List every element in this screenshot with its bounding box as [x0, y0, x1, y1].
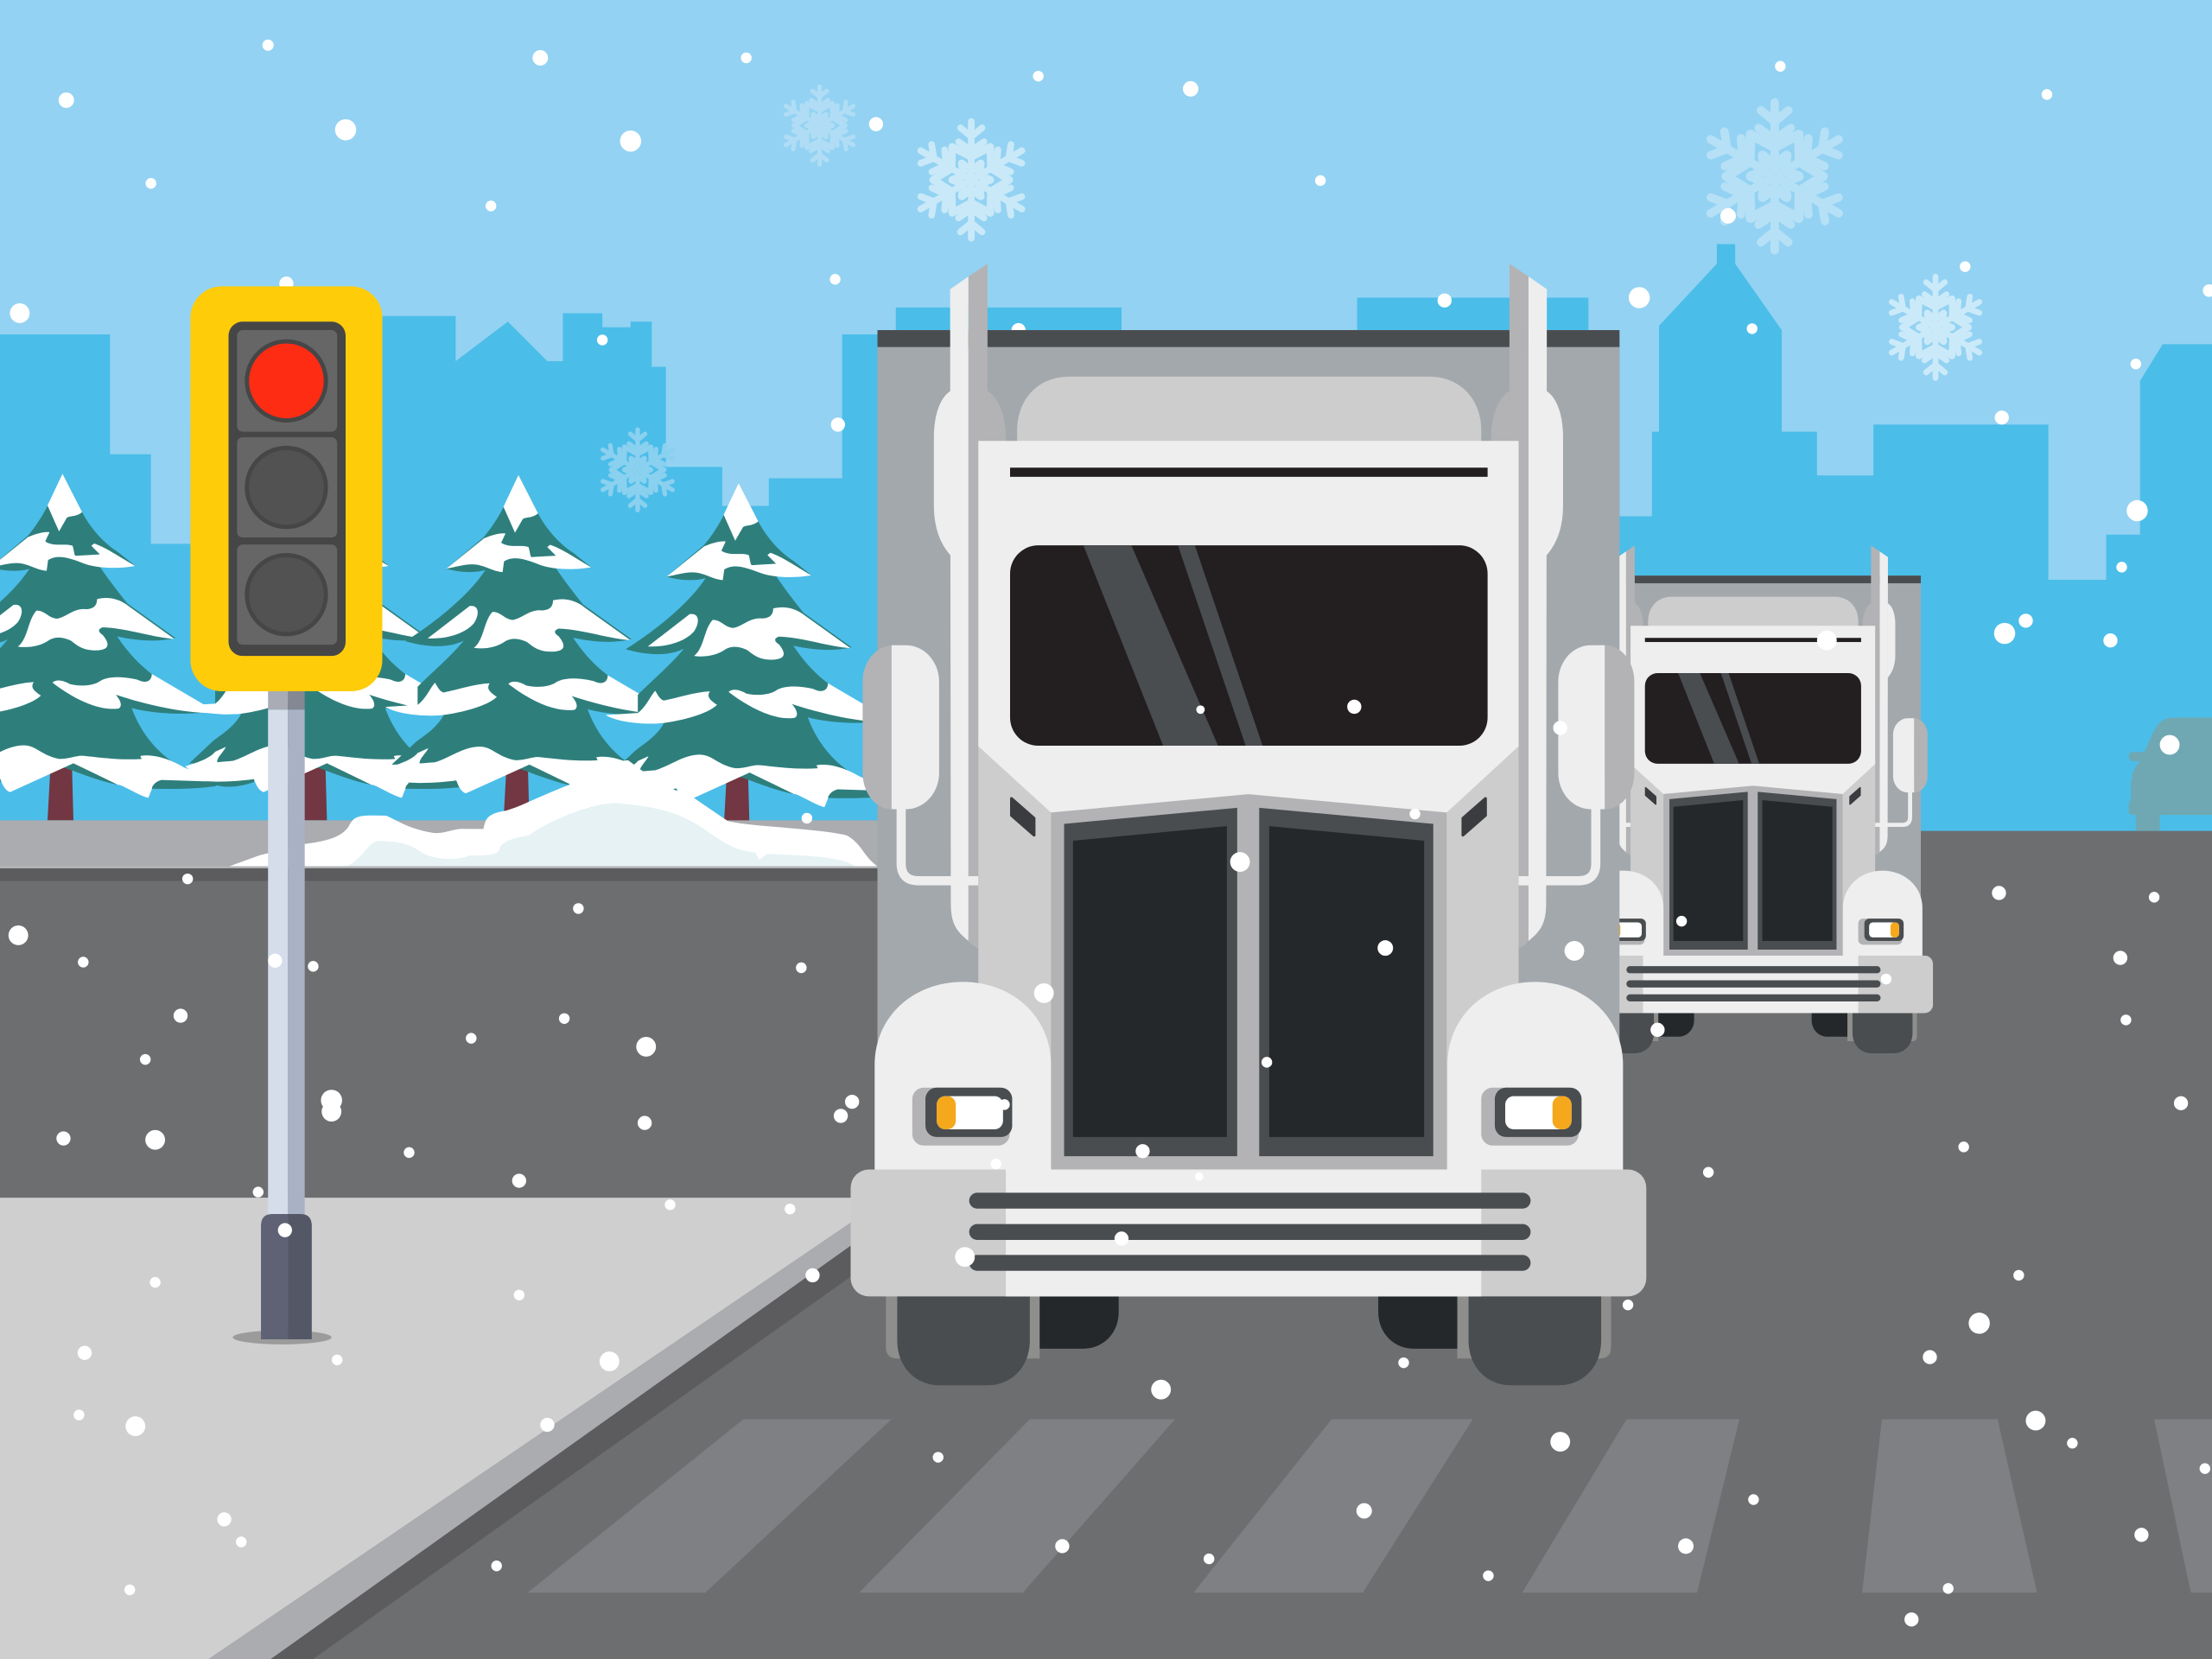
windshield [1010, 545, 1488, 746]
far pavement strip [0, 820, 878, 868]
left vent [1012, 798, 1034, 836]
pine tree 4 [606, 483, 900, 830]
left headlight [912, 1088, 1012, 1146]
truck in the foreground [850, 264, 1646, 1385]
signal housing [190, 286, 382, 691]
snowflake 2 [914, 122, 1028, 238]
snow partly hidden behind the signal and trailer [279, 276, 1026, 337]
red lamp [237, 330, 337, 432]
snowflake 4 [1886, 276, 1985, 378]
crosswalk stripes [528, 1419, 2212, 1592]
snowflake 3 [1702, 102, 1847, 251]
snowflakes [599, 86, 1985, 510]
green lamp off [237, 544, 337, 645]
snowflake 5 [599, 429, 677, 510]
snow pile [227, 760, 878, 867]
amber lamp off [237, 437, 337, 537]
right exhaust stack and mirror arm [1491, 264, 1596, 948]
cab face [978, 441, 1519, 812]
right side mirror [1558, 645, 1634, 809]
signal panel [228, 321, 346, 656]
pine tree 1 [0, 474, 224, 820]
snowflake 1 [782, 86, 857, 164]
road [0, 831, 2212, 1659]
snowy pine trees [0, 474, 900, 830]
bumper [850, 1169, 1646, 1296]
left exhaust stack and mirror arm [901, 264, 1006, 948]
sidewalk and curb [0, 1198, 861, 1659]
roof fairing [1017, 377, 1481, 442]
pine tree 3 [385, 475, 680, 822]
truck in the distance [1573, 545, 1933, 1053]
trailer [878, 330, 1619, 1171]
cab top stripe [1010, 467, 1488, 477]
right headlight [1481, 1088, 1581, 1146]
left fender [874, 982, 1051, 1171]
right vent [1463, 798, 1485, 836]
cab lower side panels [978, 734, 1519, 1171]
distant car silhouette [2129, 718, 2212, 831]
pole shadow [232, 1331, 332, 1344]
radiator grille [1051, 794, 1446, 1169]
right fender [1447, 982, 1623, 1171]
city skyline [0, 244, 2212, 847]
pine tree 2 [183, 474, 477, 820]
pole base [261, 1214, 312, 1339]
rear wheels and tyres [886, 1291, 1611, 1385]
pole [268, 691, 305, 1217]
traffic light [190, 286, 382, 1344]
left side mirror [862, 645, 939, 809]
